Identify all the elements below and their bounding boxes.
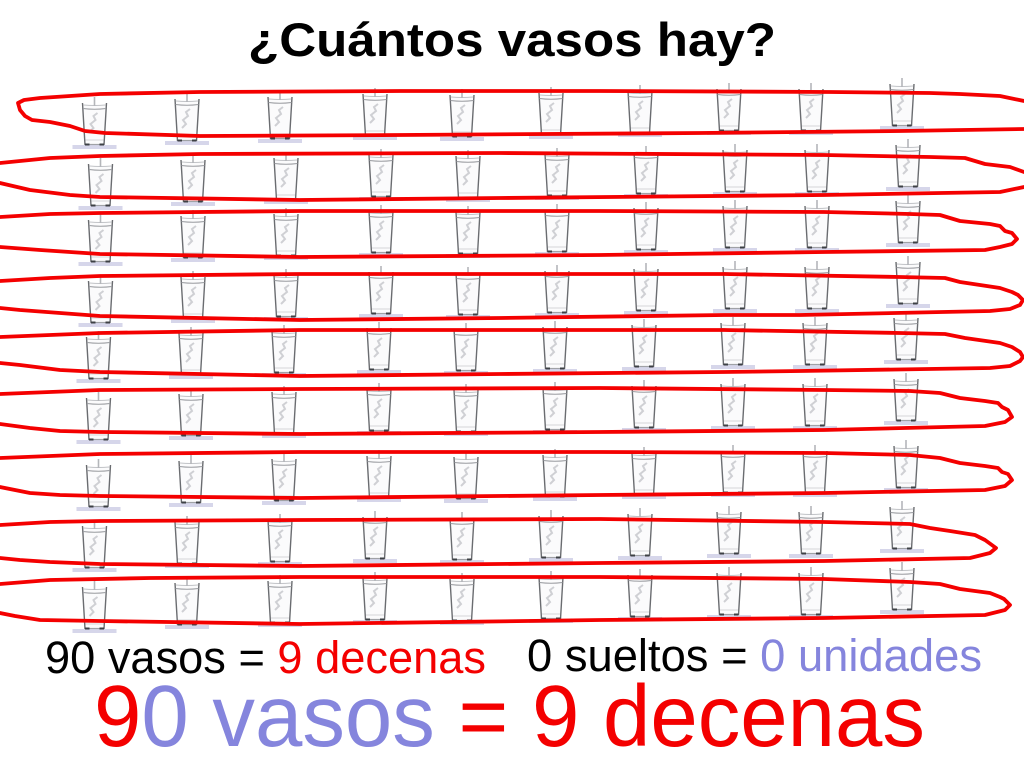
glasses: row 9	[72, 562, 924, 633]
glasses: row 4	[78, 256, 930, 327]
title: ¿Cuántos vasos hay?	[248, 13, 776, 66]
red loop: row 6	[0, 388, 1012, 434]
red loop: row 7	[0, 452, 1012, 498]
red loop: row 2	[0, 153, 1024, 200]
glasses: row 3	[78, 195, 930, 266]
glasses: row 7	[76, 440, 928, 511]
glasses: row 8	[72, 501, 924, 572]
glasses: row 1	[72, 78, 924, 149]
text: 0 sueltos = 0 unidades: 0 sueltos = 0 unidades	[527, 630, 982, 681]
red loop: row 8	[0, 519, 996, 566]
glasses: row 2	[78, 139, 930, 210]
red loop: row 9	[0, 577, 1010, 624]
red loop: row 3	[0, 211, 1017, 257]
red loop: row 4	[0, 274, 1023, 320]
glasses: row 6	[76, 373, 928, 444]
big conclusion: 90 vasos = 9 decenas: 90 vasos = 9 decenas	[94, 668, 925, 765]
red loop: row 5	[0, 330, 1023, 376]
red loop: row 1	[18, 91, 1024, 136]
glasses: row 5	[76, 312, 928, 383]
text: 90 vasos = 9 decenas: 90 vasos = 9 decenas	[45, 632, 486, 683]
